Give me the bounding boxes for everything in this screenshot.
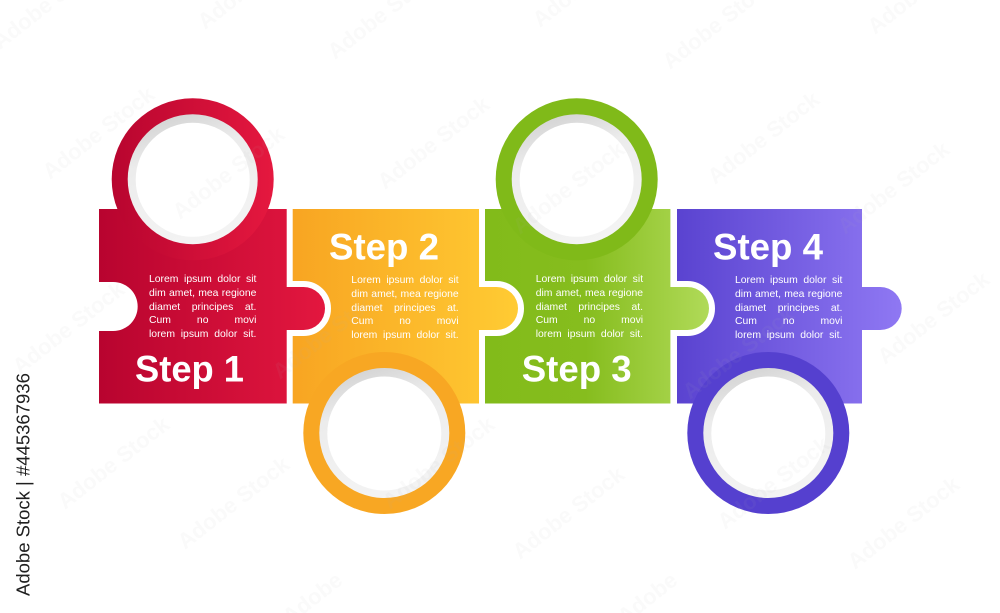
text block: step 3: diamet principes at. (536, 302, 643, 313)
heading: step 2: Step 2 (329, 226, 439, 267)
icon placeholder circle: step 2 (303, 352, 465, 514)
text block: step 2: diamet principes at. (351, 303, 459, 314)
text block: step 1: dim amet, mea regione (149, 288, 256, 299)
panel: step 1 puzzle piece (99, 98, 325, 404)
heading: step 3: Step 3 (522, 349, 632, 390)
text block: step 4: diamet principes at. (735, 303, 842, 314)
stock watermarks: Adobe Stock (833, 136, 955, 239)
text block: step 3: dim amet, mea regione (536, 288, 643, 299)
heading: step 4: Step 4 (713, 226, 823, 267)
stock watermarks: Adobe Stock (508, 136, 630, 239)
text block: step 4: dim amet, mea regione (735, 289, 842, 300)
panel: step 4 puzzle piece (677, 209, 902, 514)
text block: step 2: Lorem ipsum dolor sit (351, 275, 459, 286)
icon placeholder circle: step 1 (112, 98, 274, 260)
puzzle body: step 1 with left notch (99, 209, 287, 404)
stock watermarks: Adobe Stock (168, 121, 290, 224)
text block: step 3: lorem ipsum dolor sit. (536, 329, 643, 340)
text block: step 1: lorem ipsum dolor sit. (149, 329, 256, 340)
stock watermarks: Adobe Stock (873, 266, 995, 369)
puzzle body: step 3 (485, 209, 670, 404)
stock watermarks: Adobe Stock (843, 471, 965, 574)
stock watermarks: Adobe Stock (508, 461, 630, 564)
text block: step 2: lorem ipsum dolor sit. (351, 330, 459, 341)
puzzle tab: step 4 (860, 287, 902, 330)
text block: step 3: Lorem ipsum dolor sit (536, 274, 643, 285)
puzzle tab: step 3 (668, 287, 709, 330)
icon placeholder circle: step 3 (496, 98, 658, 260)
puzzle body: step 2 (293, 209, 479, 404)
text block: step 2 (351, 274, 459, 344)
stock watermarks: Adobe Stock (378, 411, 500, 514)
text block: step 2: Cum no movi (351, 316, 459, 327)
puzzle tab: step 2 (477, 287, 518, 330)
text block: step 4: Lorem ipsum dolor sit (735, 275, 842, 286)
text block: step 1: Lorem ipsum dolor sit (149, 274, 256, 285)
text block: step 4: Cum no movi (735, 316, 842, 327)
stock watermarks: Adobe Stock (703, 86, 825, 189)
text block: step 2: dim amet, mea regione (351, 289, 459, 300)
text block: step 1: Cum no movi (149, 315, 256, 326)
puzzle tab: step 1 (285, 287, 325, 330)
stock watermarks: Adobe Stock (713, 431, 835, 534)
stock watermarks: Adobe Stock (53, 411, 175, 514)
vertical stock id caption: Adobe Stock | #445367936 (12, 373, 34, 596)
text block: step 1 (149, 273, 257, 343)
icon placeholder circle: step 4 (687, 352, 849, 514)
text block: step 1: diamet principes at. (149, 302, 256, 313)
stock watermarks: Adobe Stock (373, 91, 495, 194)
text block: step 4 (735, 274, 843, 344)
stock watermarks: Adobe Stock (268, 281, 390, 384)
stock watermarks: Adobe Stock (8, 276, 130, 379)
stock watermarks: Adobe Stock (678, 301, 800, 404)
text block: step 3: Cum no movi (536, 315, 643, 326)
panel: step 3 puzzle piece (485, 98, 709, 404)
puzzle body: step 4 (677, 209, 862, 404)
panel: step 2 puzzle piece (293, 209, 518, 514)
heading: step 1: Step 1 (135, 349, 244, 390)
text block: step 4: lorem ipsum dolor sit. (735, 330, 842, 341)
stock watermarks: Adobe Stock (173, 451, 295, 554)
stock watermarks: Adobe Stock (38, 81, 160, 184)
text block: step 3 (536, 273, 644, 343)
